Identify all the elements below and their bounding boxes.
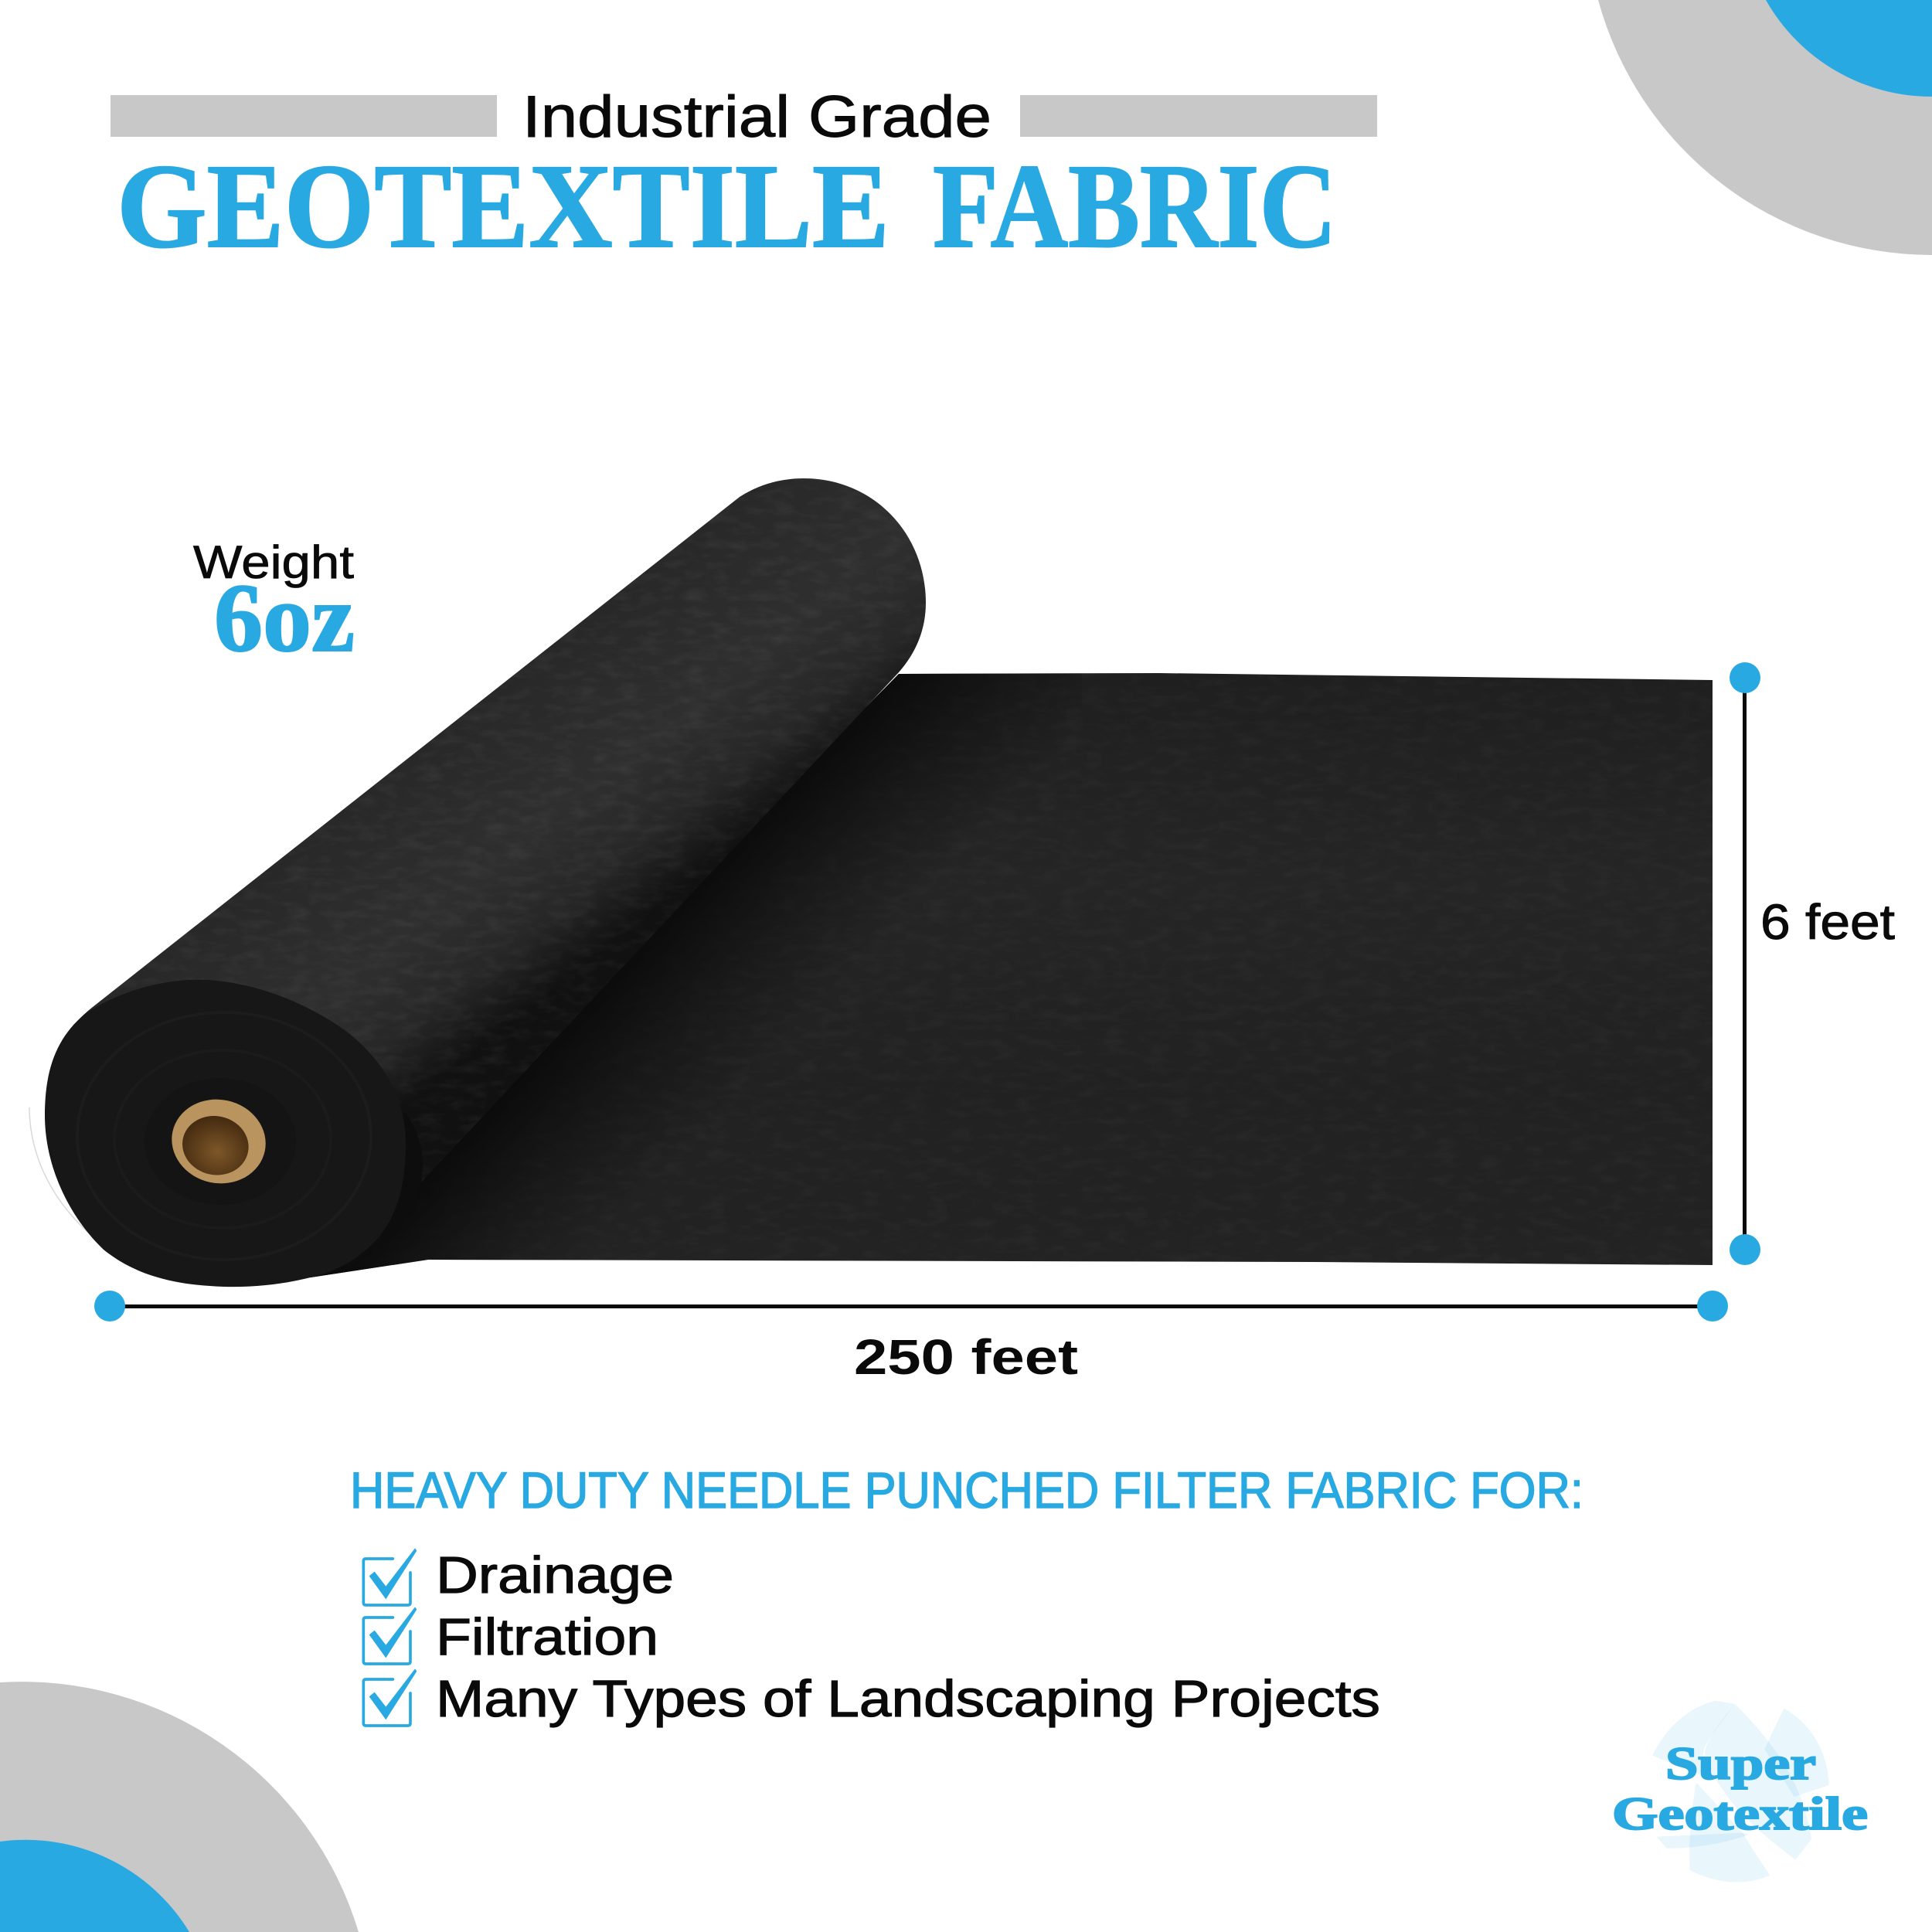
unrolled fabric sheet <box>309 665 1716 1283</box>
item: filtration: Filtration <box>436 1608 658 1666</box>
brand logo <box>1612 1701 1868 1883</box>
logo text: Geotextile: Geotextile <box>1612 1788 1868 1839</box>
item: drainage: Drainage <box>436 1546 674 1604</box>
dimension: length 250 feet <box>94 1291 1728 1385</box>
item: drainage <box>363 1546 674 1605</box>
outer wrap layer <box>232 1113 423 1277</box>
faint outline behind roll <box>29 1107 172 1281</box>
vertical dimension line <box>1743 678 1747 1250</box>
cardboard core <box>164 1090 274 1192</box>
title: Geotextile Fabric: FABRIC <box>933 139 1337 273</box>
heading band: left bar <box>111 95 497 137</box>
bottom dot <box>1730 1234 1760 1265</box>
weight callout <box>193 536 355 672</box>
uses checklist <box>363 1546 1380 1728</box>
right dot <box>1697 1291 1728 1321</box>
subtitle: Industrial Grade: Industrial Grade <box>522 84 992 150</box>
left dot <box>94 1291 125 1321</box>
top dot <box>1730 662 1760 693</box>
corner decoration: bottom left <box>0 1682 359 1932</box>
corner decoration: top right <box>1598 0 1932 255</box>
title: Geotextile Fabric: GEOTEXTILE <box>117 139 889 273</box>
logo pinwheel mark <box>1652 1701 1829 1883</box>
width label: 6 feet <box>1760 894 1895 950</box>
dimension: width 6 feet <box>1730 662 1895 1265</box>
item: landscaping: Many Types of Landscaping Projects <box>436 1670 1380 1728</box>
horizontal dimension line <box>110 1304 1713 1308</box>
uses heading: HEAVY DUTY NEEDLE PUNCHED FILTER FABRIC FOR: <box>350 1461 1583 1519</box>
logo text: Super: Super <box>1665 1738 1816 1789</box>
item: filtration <box>363 1607 658 1666</box>
weight label: Weight <box>193 536 354 588</box>
length label: 250 feet <box>854 1329 1078 1385</box>
title block <box>111 84 1377 273</box>
heading band: right bar <box>1020 95 1377 137</box>
weight value: 6oz <box>214 565 355 672</box>
roll end face <box>45 980 406 1287</box>
fabric roll photo <box>29 471 1716 1287</box>
roll body <box>45 478 926 1182</box>
